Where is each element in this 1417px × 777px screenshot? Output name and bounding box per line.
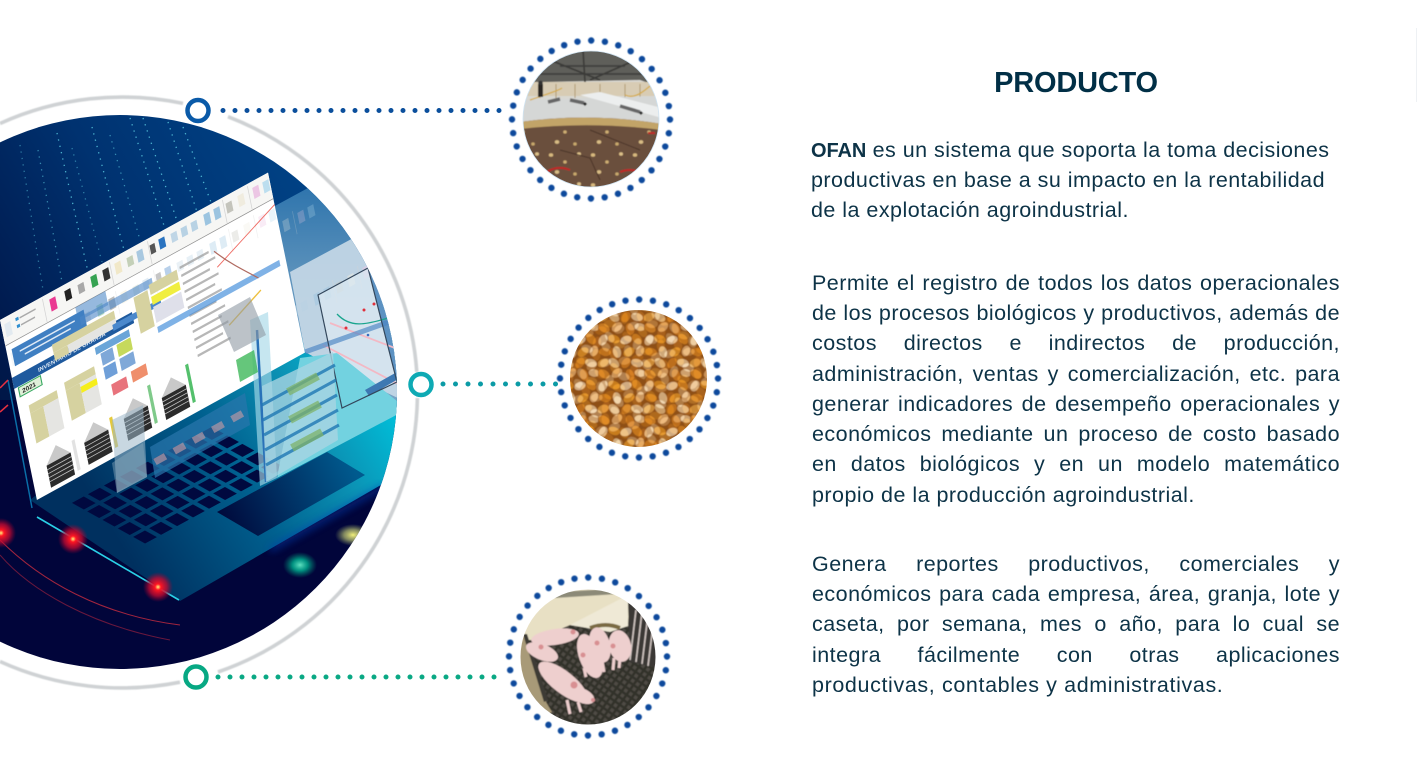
floor glows and red traces	[0, 380, 371, 640]
chart frame lines	[305, 268, 400, 408]
faint edge line at right	[1416, 28, 1417, 102]
laptop deck with keyboard	[8, 300, 400, 601]
connector: blue node and dotted line	[188, 100, 502, 121]
text: costos directos e indirectos de producción,	[812, 331, 1340, 355]
translucent rear window	[274, 188, 397, 478]
text block: OFAN intro	[811, 138, 1330, 222]
text: en datos biológicos y en un modelo matemático	[812, 452, 1340, 476]
text block: registro de datos	[812, 271, 1340, 507]
ring: gray orbit around laptop	[0, 97, 417, 688]
text: integra fácilmente con otras aplicaciones	[812, 643, 1340, 667]
translucent panels over keyboard	[112, 297, 339, 493]
trackpad	[217, 452, 365, 536]
image: laptop in circular crop	[0, 110, 410, 680]
connector: teal node and dotted line	[410, 374, 556, 395]
text: propio de la producción agroindustrial.	[812, 483, 1195, 507]
illustration: laptop, ring, connectors and photo circles	[0, 36, 722, 740]
text block: reportes	[812, 552, 1340, 697]
tan tables	[13, 270, 194, 447]
list column and chart lines	[157, 204, 280, 357]
text: Permite el registro de todos los datos operacionales	[812, 271, 1340, 295]
silos	[42, 363, 197, 488]
text: económicos para cada empresa, área, granja, lote y	[812, 582, 1340, 606]
text: caseta, por semana, mes o año, para lo cual se	[812, 612, 1340, 636]
tan tables: 2021	[22, 381, 37, 395]
photo circle: piglets	[509, 578, 667, 736]
pigs	[523, 625, 634, 714]
connector: green node and dotted line	[186, 666, 498, 688]
text: administración, ventas y comercialización, etc. para	[812, 362, 1340, 386]
text: productivas en base a su impacto en la rentabilidad	[811, 168, 1325, 192]
text: de los procesos biológicos y productivos, además de	[812, 301, 1340, 325]
laptop screen: spreadsheet window	[0, 173, 305, 500]
decorative dotted data lines	[20, 118, 212, 290]
text: generar indicadores de desempeño operacionales y	[812, 392, 1340, 416]
title bars: INVENTARIO DE GRANJA	[38, 331, 107, 374]
text: económicos mediante un proceso de costo basado	[812, 422, 1340, 446]
title bars	[12, 278, 153, 389]
text: productivas, contables y administrativas.	[812, 673, 1223, 697]
text: de la explotación agroindustrial.	[811, 198, 1129, 222]
photo circle: corn kernels	[556, 296, 722, 462]
text: OFAN es un sistema que soporta la toma decisiones	[811, 138, 1330, 162]
photo circle: poultry house	[512, 40, 670, 198]
title: PRODUCTO	[994, 67, 1158, 99]
text: Genera reportes productivos, comerciales y	[812, 552, 1340, 576]
